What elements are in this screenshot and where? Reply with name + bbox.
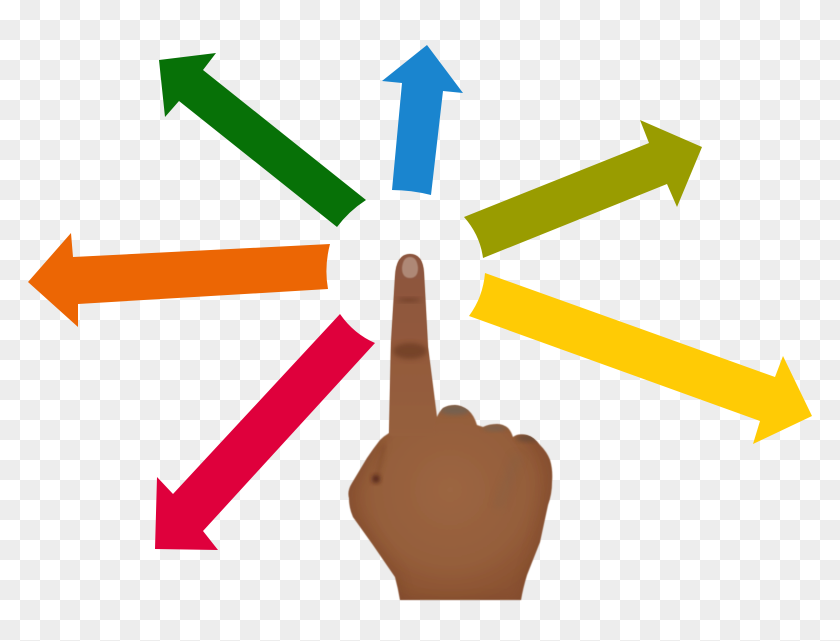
arrow: green, pointing upper left xyxy=(159,53,366,227)
arrow: red, pointing lower left xyxy=(155,314,375,550)
shading inside the hand xyxy=(349,254,552,605)
middle knuckle crease on finger xyxy=(393,343,427,359)
arrow: blue, pointing up xyxy=(382,45,463,195)
icon: pointing hand xyxy=(348,254,552,605)
thumb line xyxy=(376,458,382,472)
arrow: olive, pointing upper right xyxy=(464,120,702,258)
hand and index finger silhouette xyxy=(348,254,552,600)
upper knuckle crease on finger xyxy=(397,298,421,302)
index finger tone xyxy=(389,254,436,436)
arrow: orange, pointing left xyxy=(28,233,330,327)
knuckle highlights xyxy=(440,405,470,415)
arrow: yellow, pointing lower right xyxy=(469,273,812,444)
fingernail xyxy=(402,257,418,278)
tendon shadow xyxy=(498,455,518,508)
thumb fold shadow xyxy=(372,475,380,483)
edge darkening xyxy=(349,435,552,605)
